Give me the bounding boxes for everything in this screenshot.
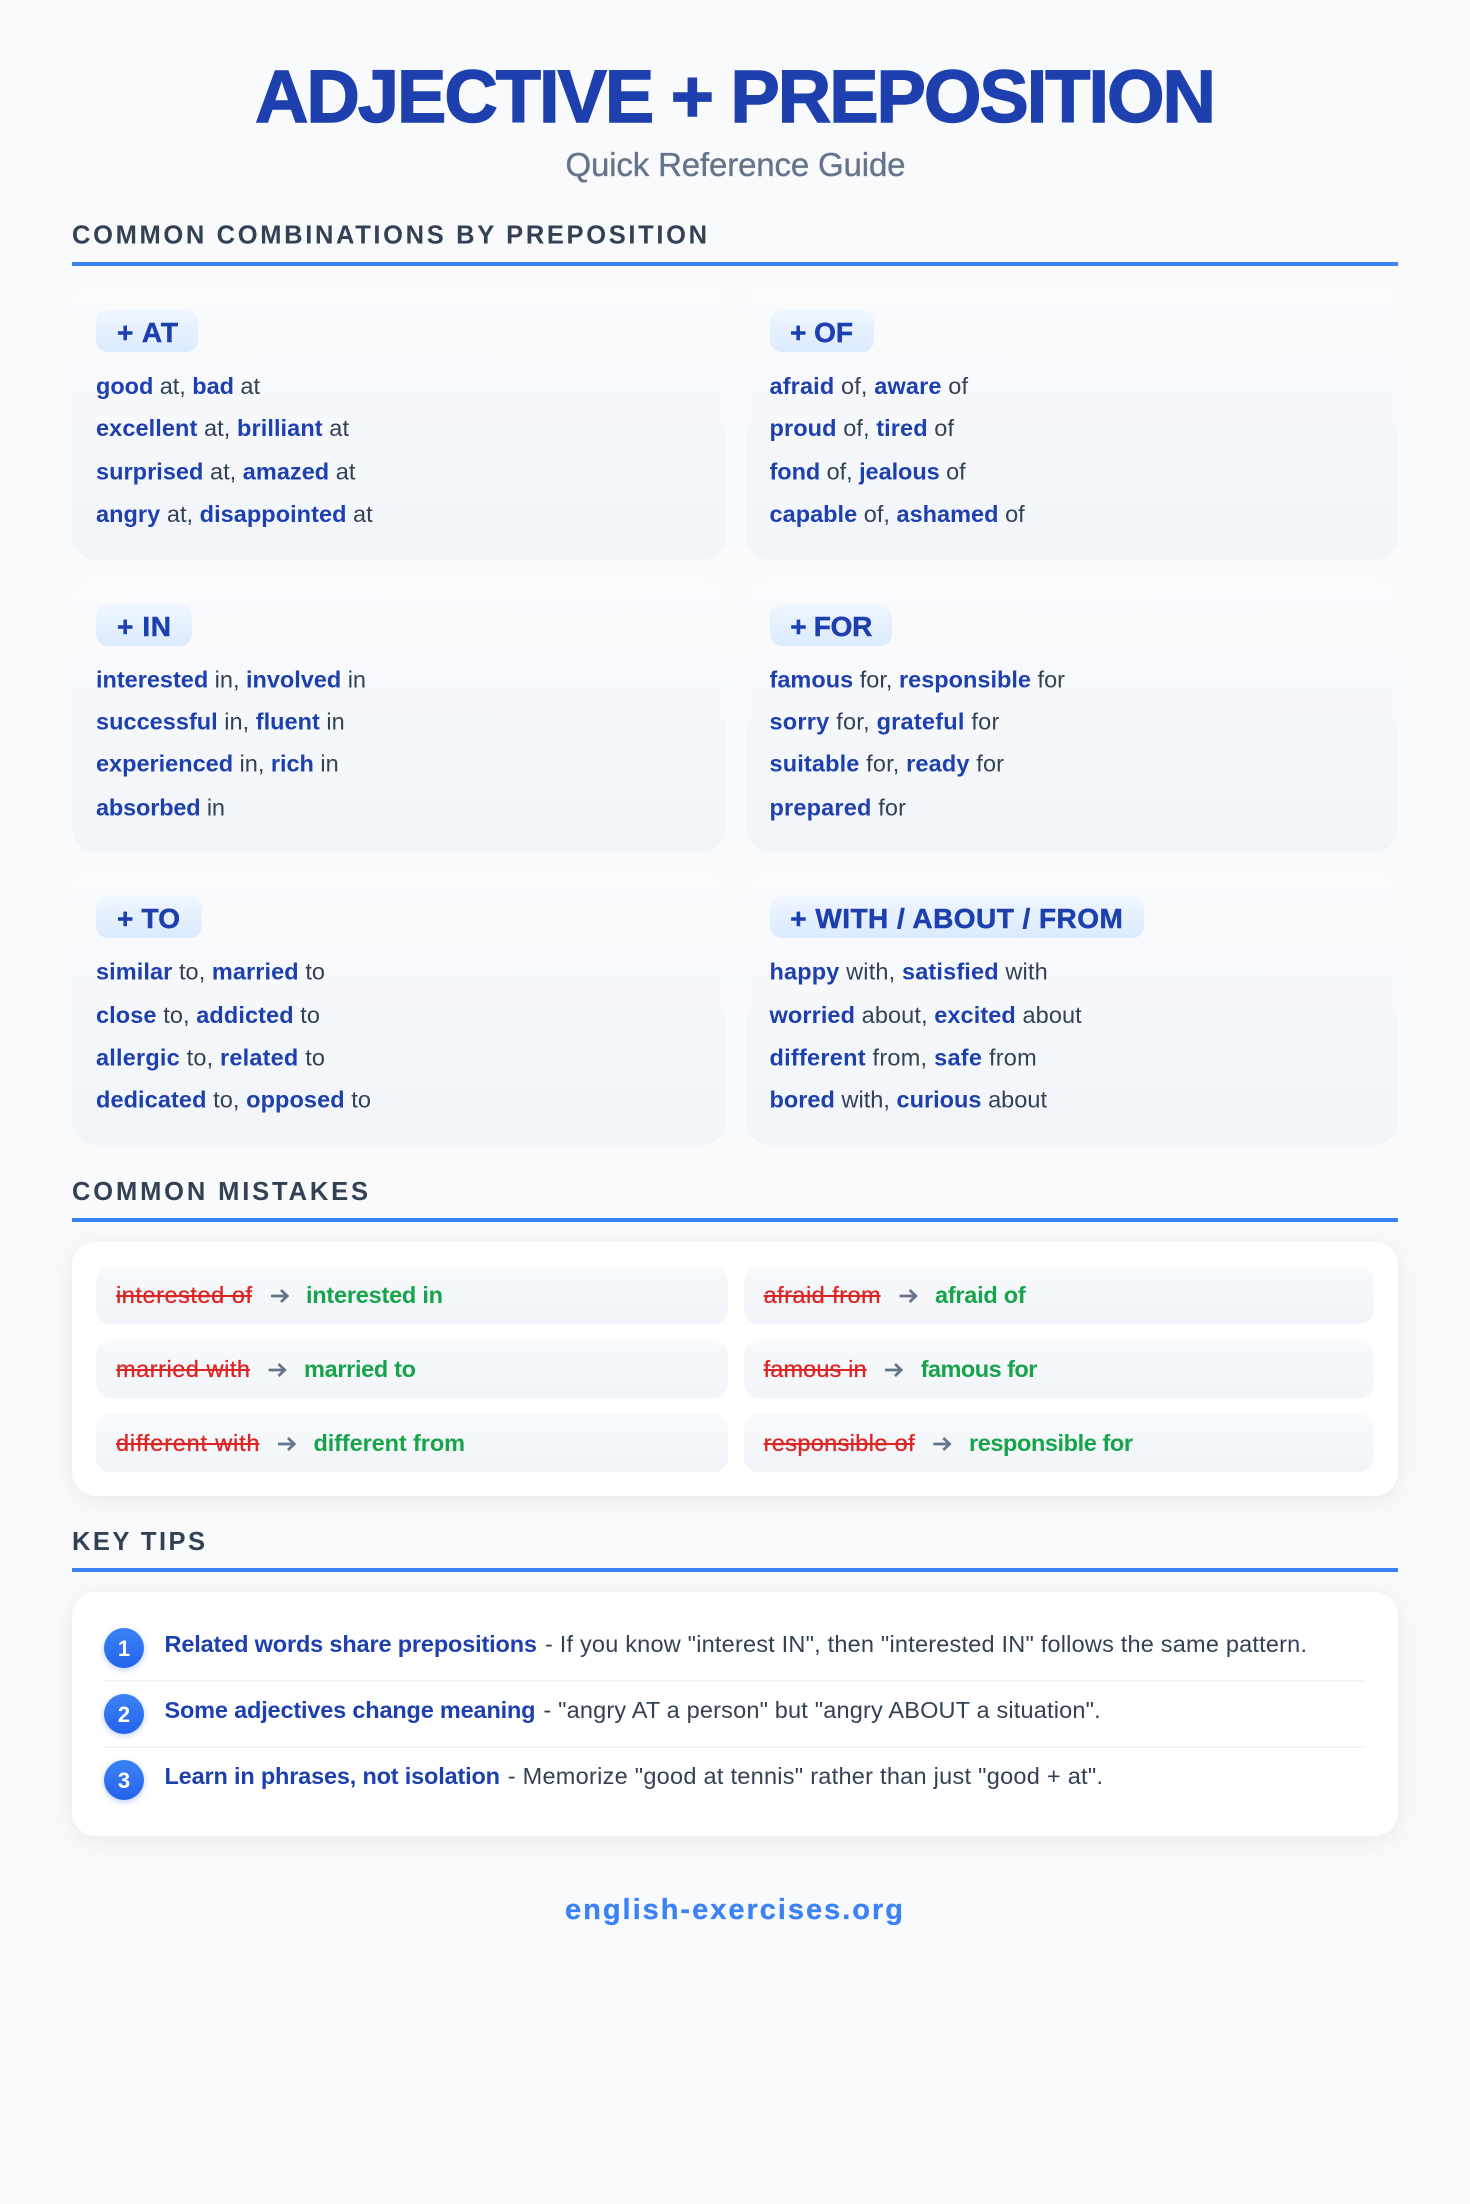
mistake: different with — [96, 1414, 728, 1472]
tip 2: Some adjectives change meaning — [164, 1697, 536, 1723]
badge: + IN — [96, 604, 192, 646]
word list: to: similar to, married to — [96, 958, 325, 984]
mistake: interested of: interested in — [306, 1282, 443, 1308]
tip 2: - "angry AT a person" but "angry ABOUT a situation". — [543, 1697, 1101, 1723]
panel: + WITH / ABOUT / FROM — [746, 873, 1398, 1145]
badge: + WITH / ABOUT / FROM — [770, 896, 1144, 938]
section heading: common mistakes: COMMON MISTAKES — [72, 1178, 368, 1206]
mistake: afraid from: afraid of — [935, 1282, 1026, 1308]
word list: to: dedicated to, opposed to — [96, 1086, 371, 1112]
panel: + FOR — [746, 580, 1398, 852]
word list: in: absorbed in — [96, 794, 225, 820]
mistake: interested of — [96, 1266, 728, 1324]
word list: to: close to, addicted to — [96, 1002, 320, 1028]
panel: key tips — [72, 1592, 1398, 1836]
mistake: responsible of: responsible for — [969, 1430, 1133, 1456]
tip 3: 3 — [118, 1768, 130, 1793]
word list: for: prepared for — [770, 794, 906, 820]
word list: in: successful in, fluent in — [96, 708, 345, 734]
mistake: responsible of — [744, 1414, 1374, 1472]
word list: in — [96, 666, 366, 820]
word list: of: capable of, ashamed of — [770, 501, 1025, 527]
mistake: afraid from — [744, 1266, 1374, 1324]
word list: with, about, from: bored with, curious about — [770, 1086, 1047, 1112]
tip 1: Related words share prepositions — [164, 1631, 537, 1657]
word list: at — [96, 373, 373, 527]
word list: for: suitable for, ready for — [770, 750, 1004, 776]
title: ADJECTIVE + PREPOSITION — [255, 55, 1216, 138]
footer: english-exercises.org — [565, 1894, 903, 1926]
mistake: different with: different from — [314, 1430, 465, 1456]
tip 1 — [104, 1628, 1307, 1668]
mistake: interested of: interested of — [116, 1282, 252, 1308]
word list: of: afraid of, aware of — [770, 373, 968, 399]
badge: + IN: + IN — [117, 611, 171, 642]
panel: common mistakes — [72, 1242, 1398, 1496]
panel: + IN — [72, 580, 726, 852]
word list: at: angry at, disappointed at — [96, 501, 373, 527]
tip 3 — [104, 1760, 1103, 1800]
mistake: famous in: famous for — [921, 1356, 1037, 1382]
word list: of — [770, 373, 1025, 527]
word list: with, about, from — [768, 958, 1082, 1112]
badge: + OF — [770, 310, 874, 352]
subtitle: Quick Reference Guide — [566, 146, 906, 183]
word list: to: allergic to, related to — [96, 1044, 325, 1070]
word list: for — [770, 666, 1065, 820]
mistake: afraid from: afraid from — [764, 1282, 881, 1308]
word list: of: fond of, jealous of — [770, 458, 966, 484]
panel: + OF — [746, 286, 1398, 560]
mistake: different with: different with — [116, 1430, 260, 1456]
tip 1: 1 — [118, 1636, 130, 1661]
word list: with, about, from: happy with, satisfied with — [770, 958, 1048, 984]
word list: of: proud of, tired of — [770, 415, 954, 441]
badge: + OF: + OF — [790, 317, 853, 348]
word list: for: sorry for, grateful for — [770, 708, 999, 734]
word list: in: interested in, involved in — [96, 666, 366, 692]
tip 2 — [104, 1694, 1101, 1734]
badge: + TO — [96, 896, 202, 938]
section heading: key tips: KEY TIPS — [72, 1528, 205, 1556]
mistake: responsible of: responsible of — [764, 1430, 915, 1456]
tip 3: - Memorize "good at tennis" rather than just "good + at". — [508, 1763, 1103, 1789]
section heading: common mistakes — [72, 1178, 1398, 1222]
panel: + TO — [72, 873, 726, 1145]
word list: at: surprised at, amazed at — [96, 458, 356, 484]
mistake: married with — [96, 1340, 728, 1398]
word list: at: good at, bad at — [96, 373, 260, 399]
mistake: famous in — [744, 1340, 1374, 1398]
mistake: famous in: famous in — [764, 1356, 867, 1382]
mistake: married with: married with — [116, 1356, 250, 1382]
badge: + AT: + AT — [117, 317, 178, 348]
tip 3: Learn in phrases, not isolation — [164, 1763, 500, 1789]
word list: at: excellent at, brilliant at — [96, 415, 349, 441]
badge: + FOR — [770, 604, 892, 646]
word list: with, about, from: worried about, excited about — [768, 1002, 1082, 1028]
word list: with, about, from: different from, safe from — [770, 1044, 1037, 1070]
section heading: key tips — [72, 1528, 1398, 1572]
word list: to — [96, 958, 371, 1112]
badge: + AT — [96, 310, 198, 352]
section heading: common combinations: COMMON COMBINATIONS BY PREPOSITION — [72, 222, 707, 250]
tip 2: 2 — [118, 1702, 130, 1727]
badge: + WITH / ABOUT / FROM: + WITH / ABOUT / FROM — [790, 903, 1123, 934]
mistake: married with: married to — [304, 1356, 416, 1382]
panel: + AT — [72, 286, 726, 560]
word list: for: famous for, responsible for — [770, 666, 1065, 692]
badge: + FOR: + FOR — [790, 611, 872, 642]
section heading: common combinations — [72, 222, 1398, 266]
badge: + TO: + TO — [117, 903, 180, 934]
tip 1: - If you know "interest IN", then "interested IN" follows the same pattern. — [545, 1631, 1307, 1657]
word list: in: experienced in, rich in — [96, 750, 339, 776]
